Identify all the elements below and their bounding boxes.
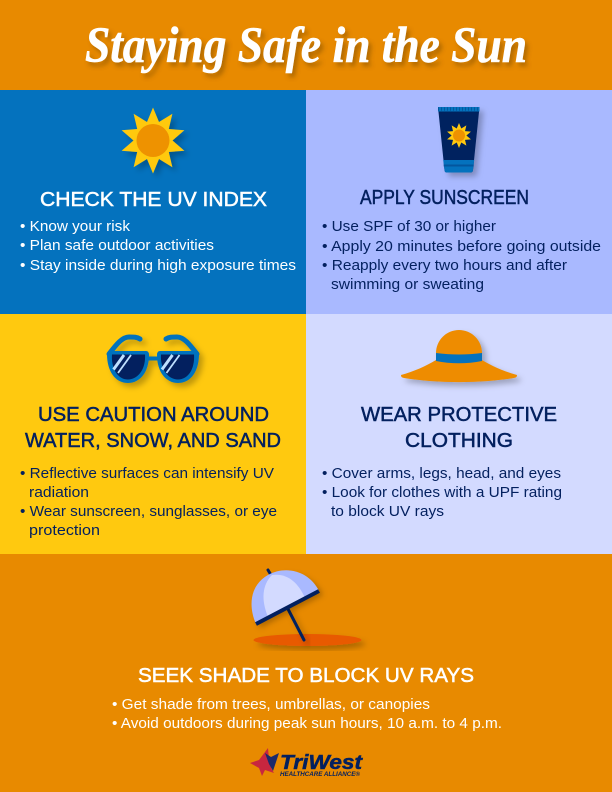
heading: use caution: USE CAUTION AROUND <box>38 404 269 426</box>
panel: protective clothing <box>306 314 612 554</box>
panel: use caution <box>0 314 306 554</box>
bullet list: sunscreen: swimming or sweating <box>331 277 484 293</box>
bullet list: UV index: • Plan safe outdoor activities <box>20 238 214 254</box>
icon: beach umbrella <box>252 570 362 646</box>
bullet list: UV index: • Stay inside during high exposure times <box>20 258 296 274</box>
bullet list: UV index: • Know your risk <box>20 219 131 235</box>
heading: seek shade: SEEK SHADE TO BLOCK UV RAYS <box>138 665 474 687</box>
heading: use caution: WATER, SNOW, AND SAND <box>25 430 281 452</box>
panel: seek shade <box>0 554 612 792</box>
panel: check the UV index <box>0 90 306 314</box>
bullet list: shade <box>112 697 502 732</box>
bullet list: UV index <box>20 219 296 274</box>
bullet list: caution: • Reflective surfaces can intensify UV <box>20 466 274 482</box>
heading: protective clothing <box>361 404 557 452</box>
logo: TriWest Healthcare Alliance: HEALTHCARE ALLIANCE® <box>280 770 360 778</box>
icon: sunglasses <box>107 337 199 383</box>
bullet list: shade: • Avoid outdoors during peak sun hours, 10 a.m. to 4 p.m. <box>112 716 502 732</box>
panel: apply sunscreen <box>306 90 612 314</box>
title: Staying Safe in the Sun <box>85 18 527 74</box>
bullet list: clothing <box>322 466 562 520</box>
bullet list: clothing: to block UV rays <box>331 504 444 520</box>
bullet list: caution: • Wear sunscreen, sunglasses, or eye <box>20 504 277 520</box>
bullet list: shade: • Get shade from trees, umbrellas, or canopies <box>112 697 430 713</box>
logo: TriWest Healthcare Alliance: TriWest <box>280 752 364 774</box>
bullet list: caution <box>20 466 277 539</box>
heading: protective clothing: WEAR PROTECTIVE <box>361 404 557 426</box>
bullet list: sunscreen: • Apply 20 minutes before going outside <box>322 239 601 255</box>
bullet list: clothing: • Look for clothes with a UPF rating <box>322 485 562 501</box>
header band <box>0 0 612 90</box>
bullet list: clothing: • Cover arms, legs, head, and eyes <box>322 466 561 482</box>
bullet list: caution: radiation <box>29 485 89 501</box>
bullet list: sunscreen: • Reapply every two hours and after <box>322 258 567 274</box>
heading: check the UV index: CHECK THE UV INDEX <box>40 189 267 211</box>
heading: protective clothing: CLOTHING <box>405 430 513 452</box>
bullet list: sunscreen: • Use SPF of 30 or higher <box>322 219 496 235</box>
icon: sunscreen tube <box>438 107 480 172</box>
heading: apply sunscreen: APPLY SUNSCREEN <box>360 187 529 209</box>
heading: use caution <box>25 404 281 452</box>
icon: hat <box>401 330 517 382</box>
bullet list: caution: protection <box>29 523 100 539</box>
logo: TriWest Healthcare Alliance <box>250 748 364 778</box>
icon: sun <box>122 108 184 174</box>
bullet list: sunscreen <box>322 219 601 293</box>
